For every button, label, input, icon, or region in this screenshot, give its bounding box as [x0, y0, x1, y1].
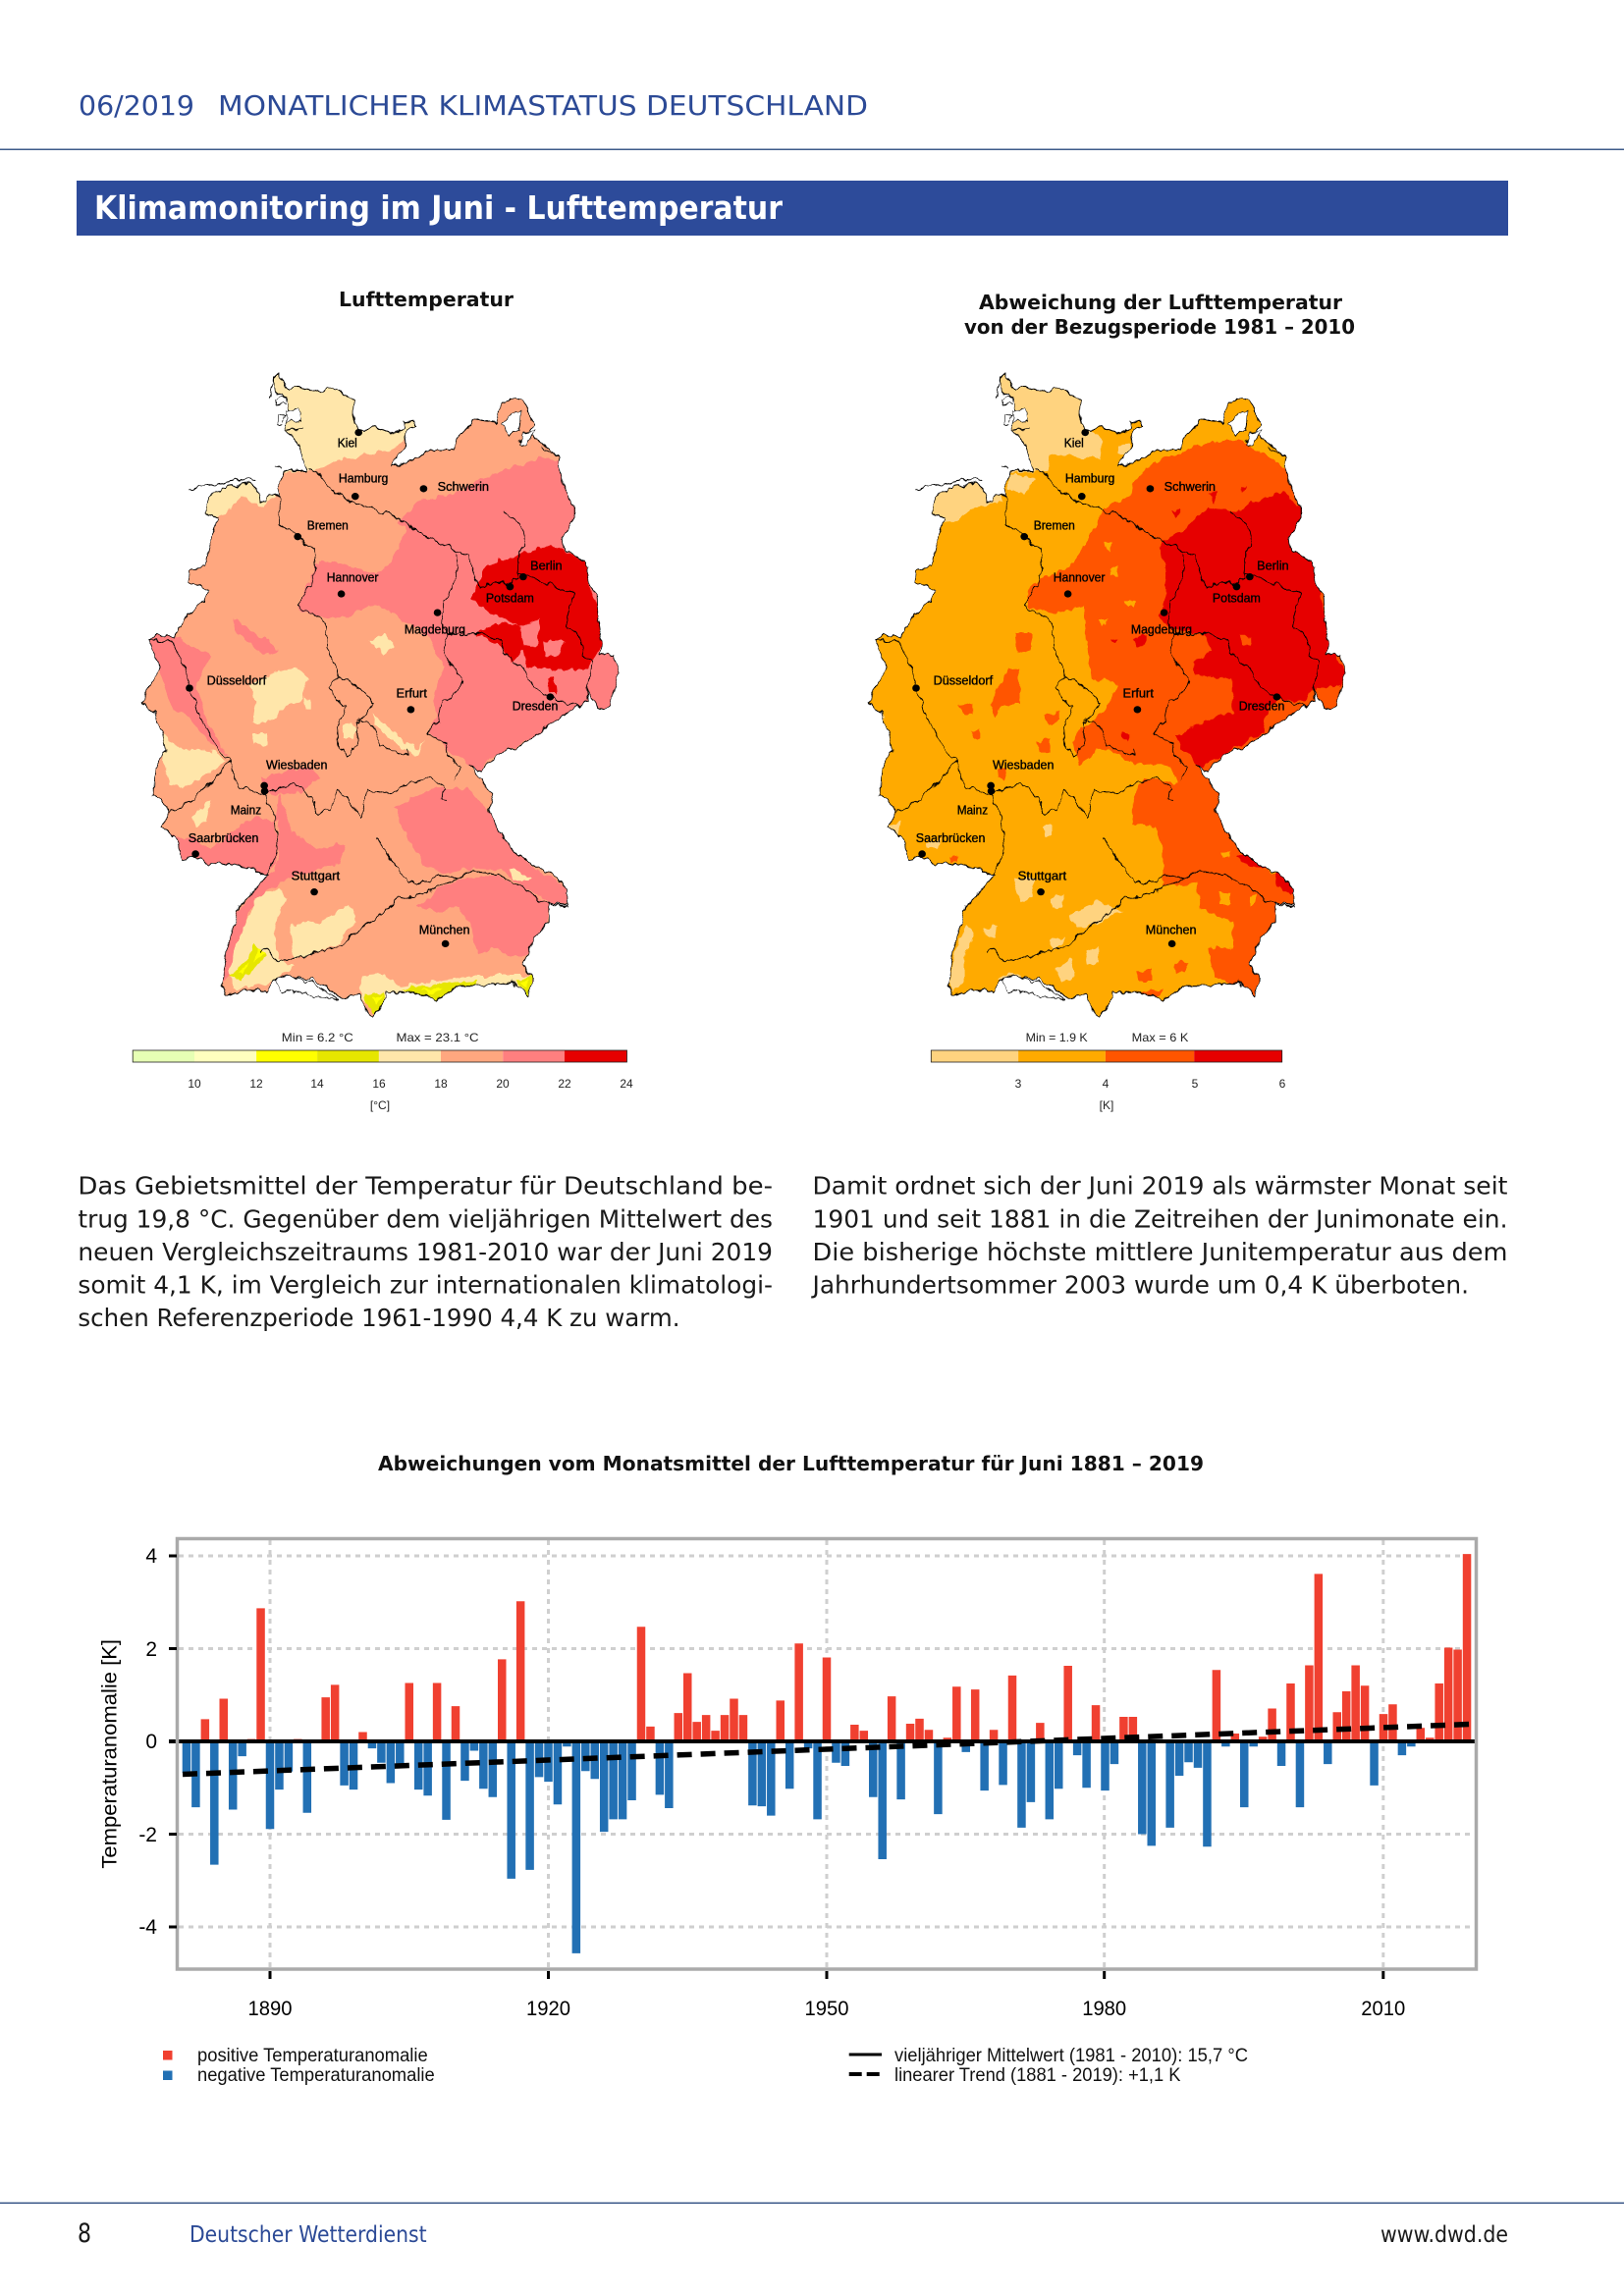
city labels: left map: Dresden [513, 699, 558, 713]
legend: temperature scale: 16 [372, 1077, 386, 1091]
text block: left column: Das Gebietsmittel der Temperatur für Deutschland be- [78, 1172, 773, 1201]
city labels: left map: Schwerin [438, 480, 489, 494]
footer: www.dwd.de [1380, 2222, 1508, 2248]
legend: temperature scale: 14 [310, 1077, 324, 1091]
chart frame [177, 1539, 1477, 1969]
city labels: right map [916, 437, 1289, 936]
y-axis labels: -2 [138, 1824, 157, 1846]
city labels: left map: Düsseldorf [207, 674, 267, 688]
city labels: right map: Potsdam [1213, 591, 1261, 605]
x-axis labels: 1980 [1082, 1998, 1126, 2020]
text block: left column: neuen Vergleichszeitraums 1981-2010 war der Juni 2019 [78, 1238, 773, 1266]
city labels: left map: Magdeburg [405, 622, 465, 636]
text block: right column: Die bisherige höchste mittlere Junitemperatur aus dem [813, 1238, 1508, 1266]
text block: right column [811, 1172, 1508, 1300]
text block: right column: Damit ordnet sich der Juni 2019 als wärmster Monat seit [813, 1172, 1508, 1201]
city labels: right map: Schwerin [1164, 480, 1216, 494]
y-axis labels: 2 [145, 1638, 157, 1661]
city labels: right map: Mainz [957, 803, 988, 817]
page header: MONATLICHER KLIMASTATUS DEUTSCHLAND [218, 89, 868, 122]
text block: left column: trug 19,8 °C. Gegenüber dem vieljährigen Mittelwert des [78, 1205, 773, 1233]
text block: left column: somit 4,1 K, im Vergleich zur internationalen klimatologi- [78, 1271, 773, 1300]
legend: anomaly scale: Min = 1.9 K [1026, 1031, 1088, 1044]
x-axis labels: 1890 [247, 1998, 293, 2020]
city labels: right map: Kiel [1064, 437, 1084, 451]
chart legend: bar colours: positive Temperaturanomalie [197, 2046, 428, 2066]
city labels: right map: Berlin [1257, 559, 1289, 572]
legend: anomaly scale: 4 [1103, 1077, 1110, 1091]
legend: temperature scale [133, 1031, 633, 1112]
city labels: right map: München [1146, 923, 1197, 936]
footer: 8 [78, 2218, 91, 2249]
city labels: left map: Berlin [530, 559, 563, 572]
y-axis labels: -4 [138, 1916, 157, 1939]
city labels: left map: Erfurt [397, 687, 427, 701]
negative bars [183, 1741, 1416, 1953]
city labels: left map: Hannover [327, 571, 379, 585]
legend: temperature scale: 10 [188, 1077, 201, 1091]
text block: left column [78, 1172, 773, 1332]
city labels: right map: Magdeburg [1131, 622, 1192, 636]
y-axis labels: 4 [145, 1545, 157, 1568]
legend: temperature scale: 20 [496, 1077, 510, 1091]
legend: anomaly scale: Max = 6 K [1132, 1031, 1188, 1044]
map: air temperature [141, 373, 619, 1018]
text block: right column: Jahrhundertsommer 2003 wurde um 0,4 K überboten. [811, 1271, 1469, 1300]
footer: Deutscher Wetterdienst [189, 2222, 427, 2248]
positive bars [201, 1554, 1471, 1741]
title banner [77, 181, 1508, 236]
city labels: right map: Saarbrücken [916, 831, 985, 845]
city labels: left map: Wiesbaden [266, 758, 327, 772]
legend: anomaly scale [931, 1031, 1286, 1112]
text block: right column: 1901 und seit 1881 in die Zeitreihen der Junimonate ein. [813, 1205, 1508, 1233]
y-axis labels: 0 [145, 1731, 157, 1753]
legend: temperature scale: 22 [558, 1077, 571, 1091]
city markers [912, 429, 1280, 947]
city labels: right map: Hamburg [1065, 472, 1114, 486]
city labels: right map: Stuttgart [1018, 869, 1067, 882]
chart legend: bar colours: negative Temperaturanomalie [197, 2065, 435, 2086]
x-axis labels: 2010 [1361, 1998, 1405, 2020]
city labels: left map: Bremen [307, 518, 349, 532]
city labels: left map: München [419, 923, 470, 936]
legend: anomaly scale: 3 [1015, 1077, 1022, 1091]
city labels: left map: Kiel [338, 437, 357, 451]
title banner: Klimamonitoring im Juni - Lufttemperatur [94, 188, 784, 227]
city labels: left map [189, 437, 563, 936]
city labels: right map: Bremen [1034, 518, 1075, 532]
heading: bar chart: Abweichungen vom Monatsmittel der Lufttemperatur für Juni 1881 – 2019 [378, 1452, 1204, 1475]
axis ticks [169, 1556, 1383, 1979]
city labels: left map: Mainz [231, 803, 261, 817]
y-axis labels [138, 1545, 157, 1939]
city labels: right map: Hannover [1054, 571, 1106, 585]
city labels: right map: Düsseldorf [934, 674, 994, 688]
x-axis labels: 1950 [805, 1998, 848, 2020]
legend: temperature scale: 24 [620, 1077, 633, 1091]
city labels: left map: Stuttgart [292, 869, 341, 882]
trend line [183, 1724, 1470, 1775]
chart legend: lines [849, 2046, 1248, 2086]
city labels: left map: Saarbrücken [189, 831, 258, 845]
legend: temperature scale: 12 [249, 1077, 263, 1091]
heading: left map: Lufttemperatur [339, 288, 514, 311]
city labels: right map: Wiesbaden [993, 758, 1054, 772]
legend: temperature scale: Min = 6.2 °C [282, 1031, 353, 1044]
legend: anomaly scale: 5 [1192, 1077, 1199, 1091]
legend: temperature scale: 18 [434, 1077, 448, 1091]
chart legend: lines: linearer Trend (1881 - 2019): +1,1 K [894, 2065, 1181, 2086]
x-axis labels: 1920 [526, 1998, 570, 2020]
city labels: left map: Potsdam [486, 591, 534, 605]
map: temperature anomaly [868, 373, 1345, 1018]
text block: left column: schen Referenzperiode 1961-1990 4,4 K zu warm. [78, 1304, 680, 1332]
city labels: right map: Erfurt [1123, 687, 1154, 701]
city labels: left map: Hamburg [339, 472, 388, 486]
chart legend: bar colours [163, 2046, 435, 2086]
legend: anomaly scale: 6 [1279, 1077, 1286, 1091]
legend: temperature scale: [°C] [370, 1098, 390, 1112]
page header: 06/2019 [79, 89, 194, 122]
y-axis title: Temperaturanomalie [K] [98, 1639, 122, 1869]
city markers [186, 429, 554, 947]
bar chart: temperature anomalies [169, 1539, 1478, 1979]
zero line: long-term mean [169, 1739, 1478, 1743]
x-axis labels [247, 1998, 1405, 2020]
heading: right map: von der Bezugsperiode 1981 – 2010 [964, 315, 1355, 339]
heading: right map [964, 291, 1355, 339]
city labels: right map: Dresden [1239, 699, 1284, 713]
chart legend: lines: vieljähriger Mittelwert (1981 - 2010): 15,7 °C [894, 2046, 1248, 2066]
legend: anomaly scale: [K] [1100, 1098, 1113, 1112]
legend: temperature scale: Max = 23.1 °C [397, 1031, 479, 1044]
footer [78, 2218, 1508, 2249]
heading: right map: Abweichung der Lufttemperatur [979, 291, 1343, 314]
